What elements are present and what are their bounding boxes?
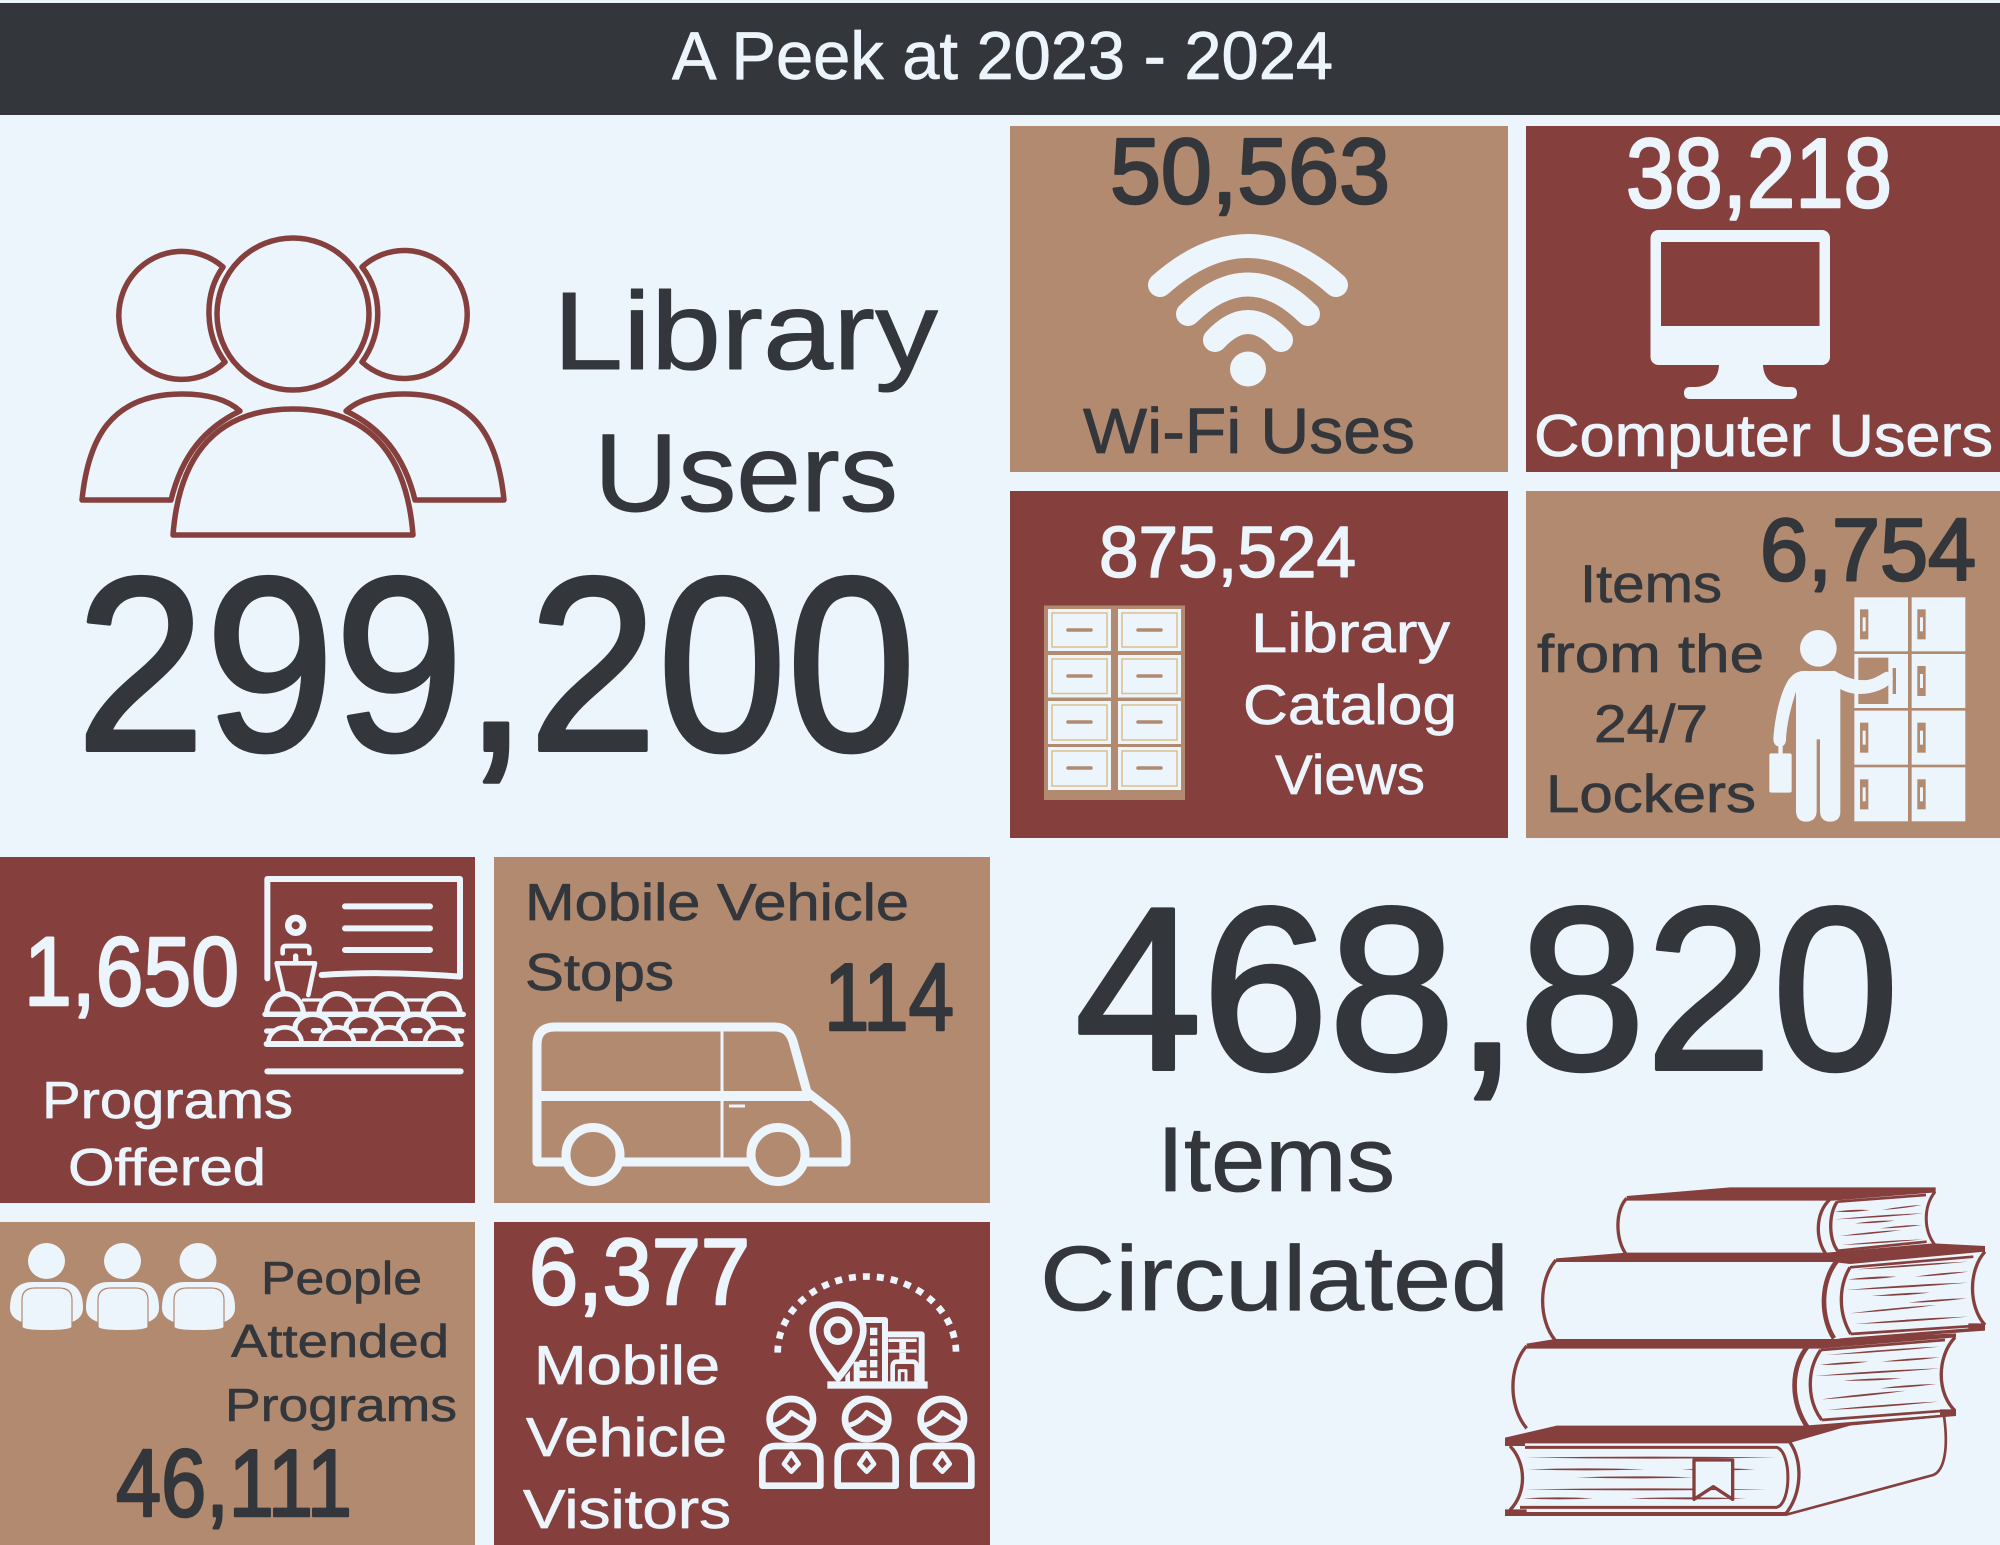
icon: three attendees — [10, 1243, 235, 1330]
label: items: Items — [1157, 1109, 1395, 1211]
label: wi-fi uses: Wi-Fi Uses — [1083, 395, 1415, 467]
number: 1,650: 1,650 — [24, 917, 239, 1026]
label: catalog: Catalog — [1243, 673, 1457, 736]
panel: mobile vehicle stops — [494, 857, 990, 1203]
number: 114: 114 — [824, 944, 954, 1051]
panel: 24/7 lockers — [1526, 491, 2000, 838]
icon: van — [537, 1027, 846, 1182]
number: 50,563: 50,563 — [1110, 119, 1390, 223]
label: circulated: Circulated — [1040, 1228, 1509, 1330]
label: library: Library — [1251, 601, 1450, 664]
label: visitors: Visitors — [523, 1478, 731, 1540]
label: programs: Programs — [225, 1379, 457, 1431]
label: items: Items — [1580, 555, 1722, 614]
number: 299,200: 299,200 — [76, 525, 916, 803]
number: 6,754: 6,754 — [1760, 500, 1976, 599]
number: 875,524: 875,524 — [1099, 513, 1356, 593]
label: 24/7: 24/7 — [1594, 695, 1708, 754]
panel: items circulated — [1040, 860, 1985, 1516]
panel: people attended programs — [0, 1222, 475, 1545]
label: programs: Programs — [42, 1072, 293, 1130]
number: 38,218: 38,218 — [1626, 118, 1892, 228]
icon: location, building and visitors — [762, 1277, 971, 1486]
icon: three users — [82, 238, 504, 535]
panel: wi-fi uses — [1010, 119, 1508, 472]
icon: person at lockers — [1769, 597, 1965, 822]
label: lockers: Lockers — [1546, 765, 1756, 824]
label: offered: Offered — [68, 1139, 266, 1197]
number: 46,111: 46,111 — [116, 1430, 352, 1537]
label: people: People — [261, 1252, 422, 1304]
panel: programs offered — [0, 857, 475, 1203]
label: vehicle: Vehicle — [526, 1406, 727, 1468]
label: mobile vehicle: Mobile Vehicle — [525, 874, 909, 932]
icon: presentation audience — [265, 879, 463, 1071]
label: attended: Attended — [231, 1315, 449, 1367]
label: views: Views — [1275, 743, 1425, 806]
label: computer users: Computer Users — [1534, 403, 1993, 469]
number: 468,820: 468,820 — [1075, 860, 1899, 1119]
panel: library users — [76, 238, 938, 803]
icon: stack of books — [1505, 1187, 1985, 1516]
icon: monitor — [1650, 230, 1830, 399]
icon: card catalog — [1044, 606, 1185, 800]
label: from the: from the — [1537, 625, 1764, 684]
panel: mobile vehicle visitors — [494, 1219, 990, 1545]
header banner — [0, 3, 2000, 115]
panel: computer users — [1526, 118, 2000, 472]
title: A Peek at 2023 - 2024 — [672, 18, 1333, 94]
panel: library catalog views — [1010, 491, 1508, 838]
icon: wifi — [1160, 246, 1336, 386]
label: stops: Stops — [525, 944, 674, 1002]
number: 6,377: 6,377 — [529, 1219, 750, 1324]
label: library: Library — [553, 270, 938, 393]
label: users: Users — [594, 412, 898, 535]
label: mobile: Mobile — [534, 1334, 720, 1396]
